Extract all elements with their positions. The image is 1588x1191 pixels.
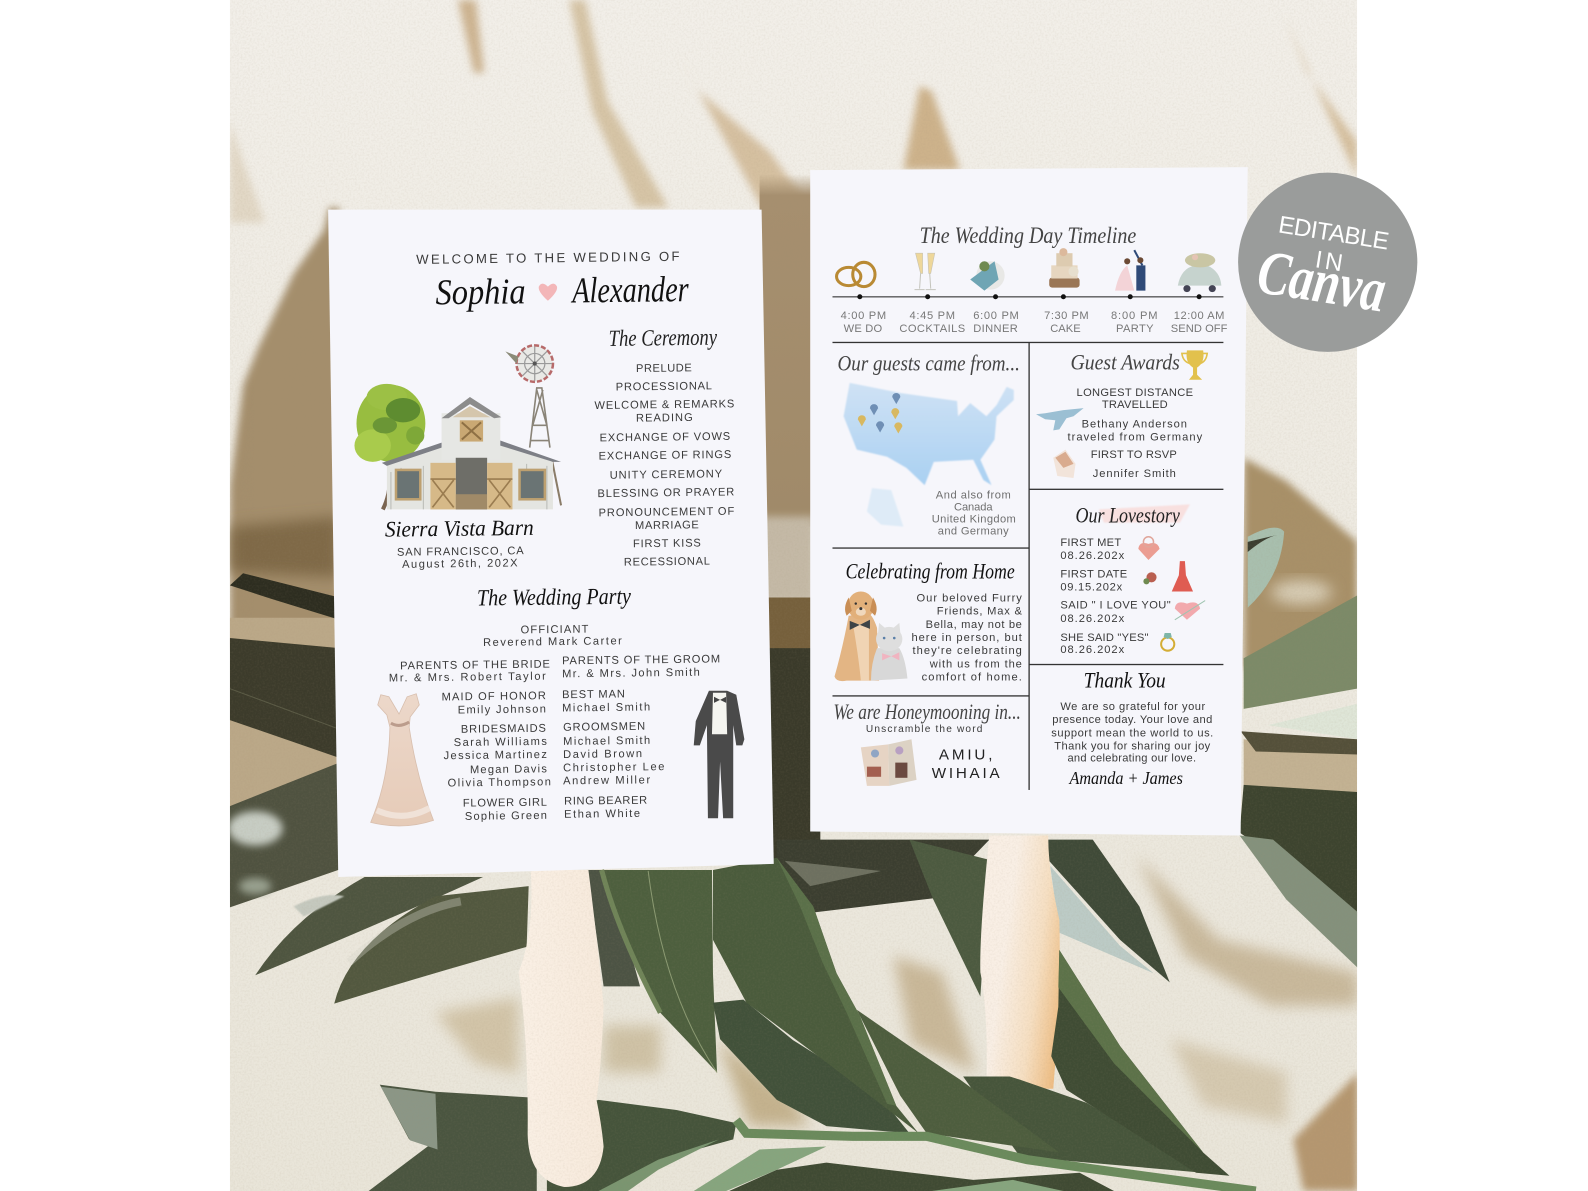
ceremony order of service xyxy=(594,362,735,569)
icon: envelope xyxy=(1053,450,1076,478)
bride side names: Olivia Thompson xyxy=(448,776,551,790)
pets paragraph: Bella, may not be xyxy=(926,619,1022,631)
panel: our lovestory: 08.26.202x xyxy=(1060,644,1125,656)
ceremony heading: The Ceremony xyxy=(609,325,718,352)
bride side names: Mr. & Mrs. Robert Taylor xyxy=(389,671,546,685)
panel: guest awards: FIRST TO RSVP xyxy=(1091,449,1177,461)
panel: guest awards: Bethany Anderson xyxy=(1082,418,1187,430)
groom side names: BEST MAN xyxy=(562,688,625,701)
illustration: tuxedo xyxy=(694,691,744,818)
bride side names: FLOWER GIRL xyxy=(463,797,547,810)
panel: our lovestory: 08.26.202x xyxy=(1060,613,1125,625)
bride side names: PARENTS OF THE BRIDE xyxy=(400,659,550,672)
upper-centre and right leaves xyxy=(909,840,989,997)
illustration: wedding dress xyxy=(371,694,433,826)
scrambled answer: AMIU, xyxy=(939,747,992,764)
icon: glass stems xyxy=(915,273,936,290)
panel: honeymoon puzzle xyxy=(833,699,1021,786)
bride side names: Sarah Williams xyxy=(454,736,547,749)
ceremony order of service: READING xyxy=(636,412,693,425)
pets paragraph: they're celebrating xyxy=(912,645,1022,657)
scrambled answer: WIHAIA xyxy=(932,765,1000,782)
groom side names: Michael Smith xyxy=(562,701,650,714)
icon: champagne glasses xyxy=(916,253,935,273)
bride side names: Sophie Green xyxy=(465,810,547,823)
groom side names: Michael Smith xyxy=(563,735,650,748)
icon: wedding cake xyxy=(1049,248,1080,288)
ceremony order of service: EXCHANGE OF RINGS xyxy=(598,449,731,463)
timeline labels: PARTY xyxy=(1116,323,1154,335)
venue details: SAN FRANCISCO, CA xyxy=(397,545,524,559)
panel: guests map xyxy=(838,351,1020,538)
icon: arrow heart xyxy=(1175,601,1205,620)
panel: guest awards: Jennifer Smith xyxy=(1093,468,1176,480)
couple names xyxy=(435,269,690,312)
pets paragraph: with us from the xyxy=(929,658,1022,670)
left paddle stick xyxy=(519,870,604,1187)
icon: dancing couple xyxy=(1115,250,1145,291)
timeline labels: 7:30 PM xyxy=(1044,310,1089,322)
icon: dinner plate and napkin xyxy=(970,261,1005,291)
dark leaves between the cards xyxy=(777,840,989,912)
panel: thank you xyxy=(1051,668,1213,788)
timeline labels: CAKE xyxy=(1050,323,1081,335)
right fan card xyxy=(810,167,1248,836)
timeline labels: WE DO xyxy=(844,323,882,335)
panel: guest awards xyxy=(1036,350,1207,480)
groom side names: GROOMSMEN xyxy=(563,721,645,734)
ceremony order of service: UNITY CEREMONY xyxy=(610,468,723,482)
bride side names xyxy=(389,659,551,823)
timeline labels: 8:00 PM xyxy=(1111,310,1158,322)
right paddle stick xyxy=(980,836,1060,1089)
groom side names: Christopher Lee xyxy=(563,761,664,774)
ceremony order of service: PROCESSIONAL xyxy=(616,380,712,393)
panel: guest awards: Guest Awards xyxy=(1070,350,1180,375)
pets paragraph: comfort of home. xyxy=(922,672,1022,684)
bottom-left leaf xyxy=(369,1085,537,1191)
panel: our lovestory: FIRST DATE xyxy=(1060,568,1127,580)
ceremony order of service: RECESSIONAL xyxy=(624,556,710,569)
icon: wedding rings xyxy=(837,262,875,287)
pets paragraph xyxy=(911,593,1023,684)
panel: our lovestory xyxy=(1060,503,1205,656)
panel: thank you: support mean the world to us. xyxy=(1051,727,1213,739)
welcome heading: WELCOME TO THE WEDDING OF xyxy=(416,249,680,267)
groom side names: Mr. & Mrs. John Smith xyxy=(562,667,700,680)
timeline labels: SEND OFF xyxy=(1171,323,1228,335)
icon: airplane xyxy=(1036,408,1084,430)
bride side names: Megan Davis xyxy=(470,763,547,776)
venue details: Sierra Vista Barn xyxy=(385,515,534,542)
bride side names: Jessica Martinez xyxy=(444,749,547,762)
cloth stains lower xyxy=(435,856,1358,1126)
icon: trophy xyxy=(1182,350,1207,380)
panel: our lovestory: SAID " I LOVE YOU" xyxy=(1060,600,1171,612)
groom side names: RING BEARER xyxy=(564,795,647,808)
timeline labels: 4:45 PM xyxy=(909,310,955,322)
map of the USA xyxy=(844,383,1014,527)
bride side names: MAID OF HONOR xyxy=(441,690,546,703)
panel: honeymoon puzzle: We are Honeymooning in... xyxy=(833,699,1021,724)
timeline labels: 12:00 AM xyxy=(1174,310,1224,322)
panel: thank you: Thank you for sharing our joy xyxy=(1054,740,1211,752)
ceremony order of service: PRELUDE xyxy=(636,362,692,375)
timeline labels: DINNER xyxy=(973,323,1018,335)
timeline labels: 4:00 PM xyxy=(841,310,886,322)
panel: thank you: We are so grateful for your xyxy=(1060,701,1205,713)
timeline labels: COCKTAILS xyxy=(899,323,965,335)
panel: guest awards: traveled from Germany xyxy=(1067,432,1203,444)
badge: editable in Canva: Canva xyxy=(1253,236,1391,326)
icon: diamond ring xyxy=(1161,633,1174,651)
pets paragraph: Our beloved Furry xyxy=(917,593,1022,605)
panel: our lovestory: SHE SAID "YES" xyxy=(1060,632,1149,644)
other countries note: Canada xyxy=(954,501,993,513)
venue details xyxy=(385,515,534,571)
illustration: barn, tree and windmill xyxy=(354,345,561,509)
officiant xyxy=(483,624,622,649)
wedding party heading: The Wedding Party xyxy=(477,584,632,612)
background photo: linen cloth and leaves xyxy=(228,0,1358,1191)
panel: honeymoon puzzle: Unscramble the word xyxy=(866,724,982,735)
timeline icons xyxy=(837,248,1221,292)
centre leaves xyxy=(604,870,717,1072)
ceremony order of service: BLESSING OR PRAYER xyxy=(597,486,734,500)
brown shadow left xyxy=(230,208,339,648)
other countries note: United Kingdom xyxy=(932,514,1016,526)
other countries note: And also from xyxy=(936,489,1011,501)
timeline heading: The Wedding Day Timeline xyxy=(920,223,1136,249)
panel: thank you: presence today. Your love and xyxy=(1052,714,1212,726)
groom side names: David Brown xyxy=(563,748,642,761)
icon: heart lock xyxy=(1138,537,1160,560)
panel: thank you: and celebrating our love. xyxy=(1067,753,1196,765)
badge: editable in Canva: EDITABLE xyxy=(1277,211,1391,256)
officiant: OFFICIANT xyxy=(520,624,589,636)
illustration: dog and cat xyxy=(835,591,907,681)
panel: celebrating from home: Celebrating from Home xyxy=(846,558,1015,583)
officiant: Reverend Mark Carter xyxy=(483,635,622,649)
ceremony order of service: MARRIAGE xyxy=(635,519,699,532)
panel: guests map: Our guests came from... xyxy=(838,351,1020,376)
groom side names: Ethan White xyxy=(564,808,640,821)
illustration: travel book xyxy=(861,739,917,786)
timeline labels xyxy=(841,310,1228,335)
icon: bouquet xyxy=(1143,572,1157,584)
icon: wedding car xyxy=(1178,253,1221,292)
panel: our lovestory: Our Lovestory xyxy=(1076,503,1180,528)
panel: celebrating from home xyxy=(835,558,1023,684)
icon: red dress xyxy=(1172,561,1193,591)
panel: our lovestory: 08.26.202x xyxy=(1060,550,1125,562)
panel: our lovestory: 09.15.202x xyxy=(1060,581,1123,593)
teal cloth sheen xyxy=(1050,866,1154,973)
timeline labels: 6:00 PM xyxy=(973,310,1019,322)
groom side names: PARENTS OF THE GROOM xyxy=(562,653,720,667)
venue details: August 26th, 202X xyxy=(402,557,518,571)
panel: thank you: Thank You xyxy=(1084,668,1166,693)
ceremony order of service: WELCOME & REMARKS xyxy=(594,398,734,412)
couple names: Sophia xyxy=(435,271,526,312)
bride side names: Emily Johnson xyxy=(458,703,546,717)
leaves at right edge xyxy=(1248,528,1284,608)
ceremony order of service: EXCHANGE OF VOWS xyxy=(599,431,730,444)
pets paragraph: Friends, Max & xyxy=(937,606,1022,618)
panel: thank you: Amanda + James xyxy=(1069,768,1183,788)
panel: guest awards: TRAVELLED xyxy=(1102,399,1168,411)
other countries note: and Germany xyxy=(938,526,1009,538)
left fan card xyxy=(328,210,774,877)
badge: editable in Canva xyxy=(1238,173,1417,352)
infographic: wedding fan program mockup xyxy=(230,0,1418,1191)
panel: guest awards: LONGEST DISTANCE xyxy=(1077,387,1193,399)
groom side names xyxy=(562,653,720,821)
pets paragraph: here in person, but xyxy=(911,632,1023,644)
brown shadow right xyxy=(1244,458,1357,668)
scrambled answer xyxy=(932,747,1000,782)
ceremony order of service: PRONOUNCEMENT OF xyxy=(598,506,735,519)
ceremony order of service: FIRST KISS xyxy=(633,537,701,550)
couple names: Alexander xyxy=(570,269,690,311)
badge: editable in Canva: IN xyxy=(1313,246,1345,277)
groom side names: Andrew Miller xyxy=(563,774,651,787)
panel: our lovestory: FIRST MET xyxy=(1060,537,1121,549)
bride side names: BRIDESMAIDS xyxy=(461,723,546,736)
other countries note xyxy=(932,489,1016,538)
timeline line and dots xyxy=(832,294,1223,299)
